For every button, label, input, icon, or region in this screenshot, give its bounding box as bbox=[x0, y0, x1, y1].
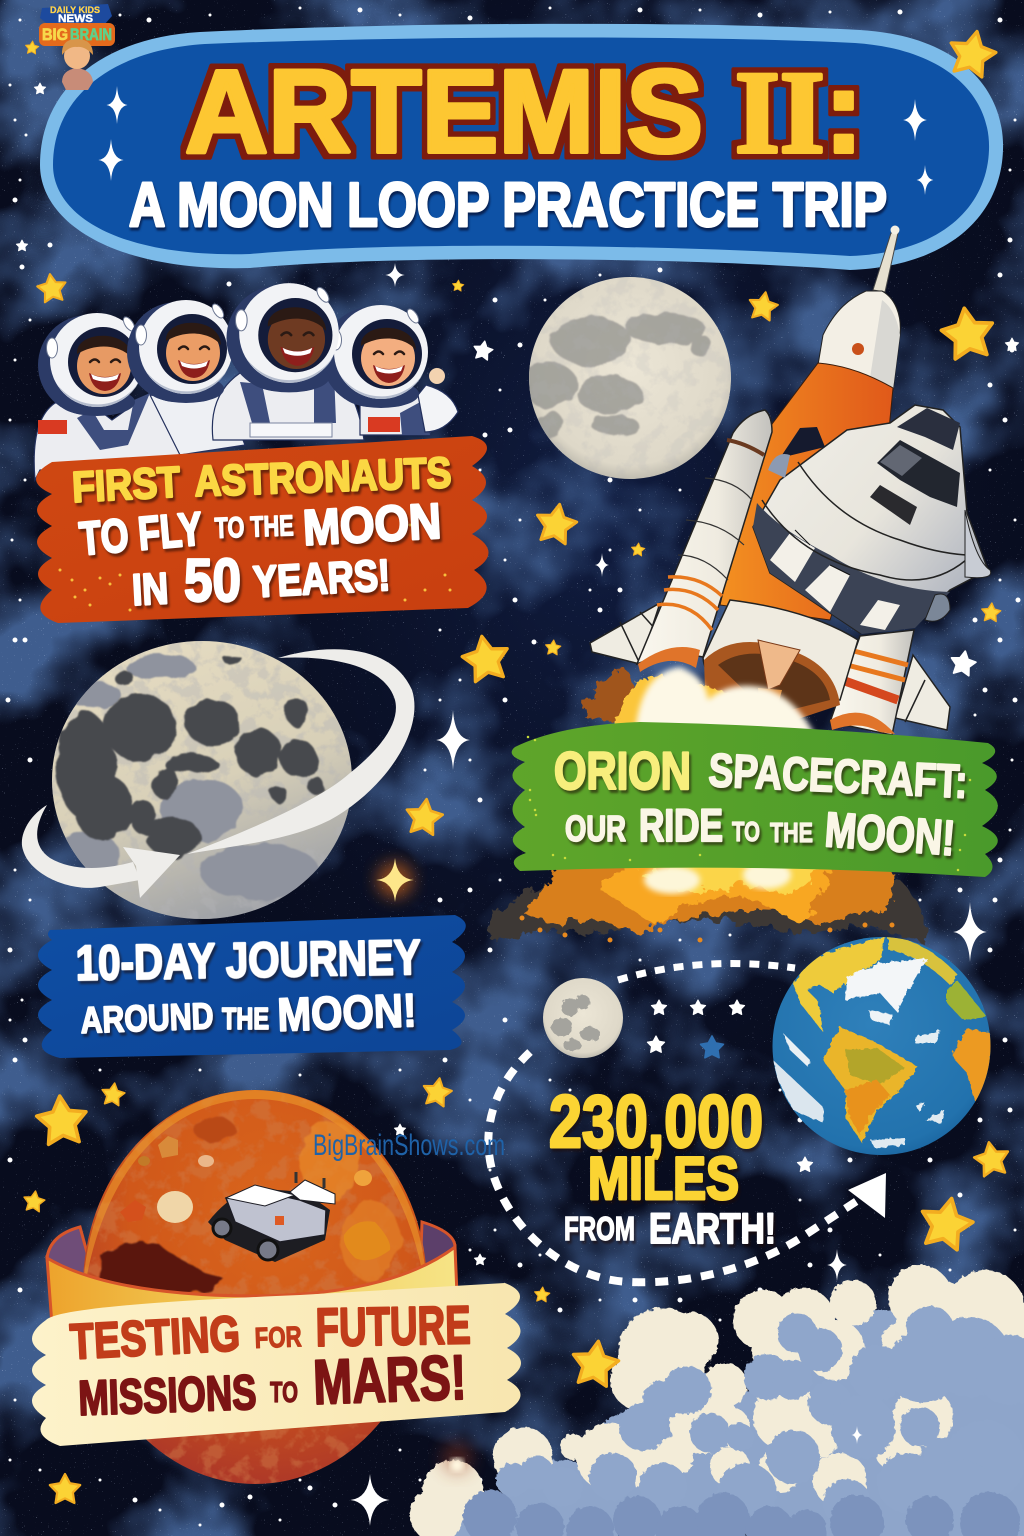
top moon bbox=[522, 277, 731, 479]
rocket wings bbox=[590, 603, 950, 730]
logo: Daily Kids News with Big Brain: BIG bbox=[42, 25, 68, 44]
astronaut 4 bbox=[322, 305, 428, 408]
text: 230,000 miles from earth: MILES bbox=[588, 1145, 739, 1212]
mars surface patches bbox=[100, 1116, 400, 1295]
text: first astronauts bbox=[71, 449, 452, 512]
astronaut 1 bbox=[38, 313, 144, 416]
rocket exhaust flames bbox=[582, 667, 815, 735]
text: our ride to the moon: OUR bbox=[565, 808, 626, 849]
mars rocks bbox=[120, 1136, 390, 1260]
rocket orange core bbox=[720, 363, 893, 620]
text: 230,000 miles from earth bbox=[549, 1080, 776, 1253]
text: 230,000 miles from earth: 230,000 bbox=[549, 1080, 763, 1163]
logo: Daily Kids News with Big Brain bbox=[39, 4, 115, 90]
text: 230,000 miles from earth: EARTH! bbox=[649, 1205, 776, 1253]
text: around the moon: MOON! bbox=[276, 983, 417, 1041]
watermark: BigBrainShows.com: BigBrainShows.com bbox=[313, 1129, 505, 1162]
Africa bbox=[953, 1028, 992, 1107]
text: missions to mars bbox=[77, 1343, 467, 1426]
text: around the moon bbox=[80, 983, 417, 1041]
North America bbox=[793, 936, 885, 1032]
text: to fly to the moon bbox=[77, 493, 442, 565]
text: to fly to the moon: MOON bbox=[302, 493, 442, 556]
text: our ride to the moon: TO bbox=[732, 816, 760, 847]
text: around the moon: AROUND bbox=[80, 995, 214, 1041]
text: our ride to the moon: THE bbox=[770, 817, 813, 848]
icon: glowing star and blue star bbox=[376, 858, 723, 1058]
text: missions to mars: TO bbox=[270, 1377, 298, 1409]
left booster bbox=[637, 410, 772, 672]
text: first astronauts: ASTRONAUTS bbox=[194, 449, 452, 506]
rocket lower body and engines bbox=[703, 600, 858, 725]
icon: orbit arrow bbox=[22, 649, 414, 898]
banner: 10-day journey bbox=[38, 915, 466, 1058]
text: orion spacecraft: ORION bbox=[554, 742, 691, 801]
Europe bbox=[947, 980, 987, 1020]
text: testing for future: FUTURE bbox=[315, 1295, 471, 1358]
small moon bbox=[543, 978, 623, 1058]
heading: ARTEMIS II: ARTEMIS II: bbox=[185, 46, 863, 178]
astronaut 2 bbox=[127, 300, 233, 403]
mars planet with ring bbox=[47, 1090, 457, 1484]
astronaut 3 bbox=[226, 283, 339, 392]
text: around the moon: THE bbox=[222, 1001, 269, 1036]
astronauts group bbox=[34, 283, 458, 480]
rocket illustration bbox=[582, 226, 991, 735]
text: testing for future bbox=[69, 1295, 471, 1370]
icon: cloud glow star bbox=[441, 1442, 473, 1474]
cratered moon bbox=[22, 641, 414, 919]
right booster bbox=[830, 630, 914, 735]
text: to fly to the moon: TO THE bbox=[214, 510, 294, 545]
orion capsule bbox=[753, 405, 991, 634]
banner: first astronauts bbox=[36, 436, 489, 623]
icon: title sparkles bbox=[98, 86, 933, 195]
text: 230,000 miles from earth: FROM bbox=[564, 1210, 635, 1247]
text: our ride to the moon: RIDE bbox=[639, 800, 723, 851]
title banner bbox=[40, 24, 1003, 270]
fire and sparks under rocket bbox=[490, 860, 926, 945]
text: first astronauts: FIRST bbox=[71, 458, 181, 512]
text: orion spacecraft bbox=[554, 742, 969, 808]
text: missions to mars: MISSIONS bbox=[77, 1366, 257, 1426]
logo: Daily Kids News with Big Brain: BRAIN bbox=[70, 25, 112, 44]
text: testing for future: TESTING bbox=[69, 1305, 241, 1370]
text: missions to mars: MARS! bbox=[312, 1343, 467, 1418]
text: testing for future: FOR bbox=[254, 1321, 302, 1355]
logo: Daily Kids News with Big Brain: DAILY KIDS bbox=[50, 5, 100, 15]
text: in 50 years: IN bbox=[131, 564, 169, 615]
rocket nose and mast bbox=[818, 226, 900, 390]
distance loop arrow bbox=[488, 964, 886, 1282]
icon: rover bbox=[208, 1172, 335, 1262]
earth bbox=[772, 936, 992, 1155]
ring front band bbox=[47, 1247, 457, 1340]
banner: orion spacecraft bbox=[512, 722, 998, 877]
text: in 50 years bbox=[131, 547, 391, 615]
ring back bbox=[47, 1222, 455, 1300]
text: 10-day journey: 10-DAY JOURNEY bbox=[75, 931, 421, 991]
Clouds bbox=[845, 958, 927, 1012]
clouds bbox=[410, 1265, 1024, 1536]
South America bbox=[823, 1027, 918, 1143]
text: to fly to the moon: TO FLY bbox=[77, 501, 204, 565]
astronaut suits bbox=[34, 368, 458, 480]
text: our ride to the moon bbox=[565, 800, 957, 866]
text: in 50 years: YEARS! bbox=[252, 551, 391, 607]
logo: Daily Kids News with Big Brain: NEWS bbox=[58, 13, 93, 25]
banner: testing for future missions bbox=[32, 1283, 521, 1446]
text: our ride to the moon: MOON! bbox=[823, 803, 957, 866]
text: in 50 years: 50 bbox=[184, 547, 241, 614]
